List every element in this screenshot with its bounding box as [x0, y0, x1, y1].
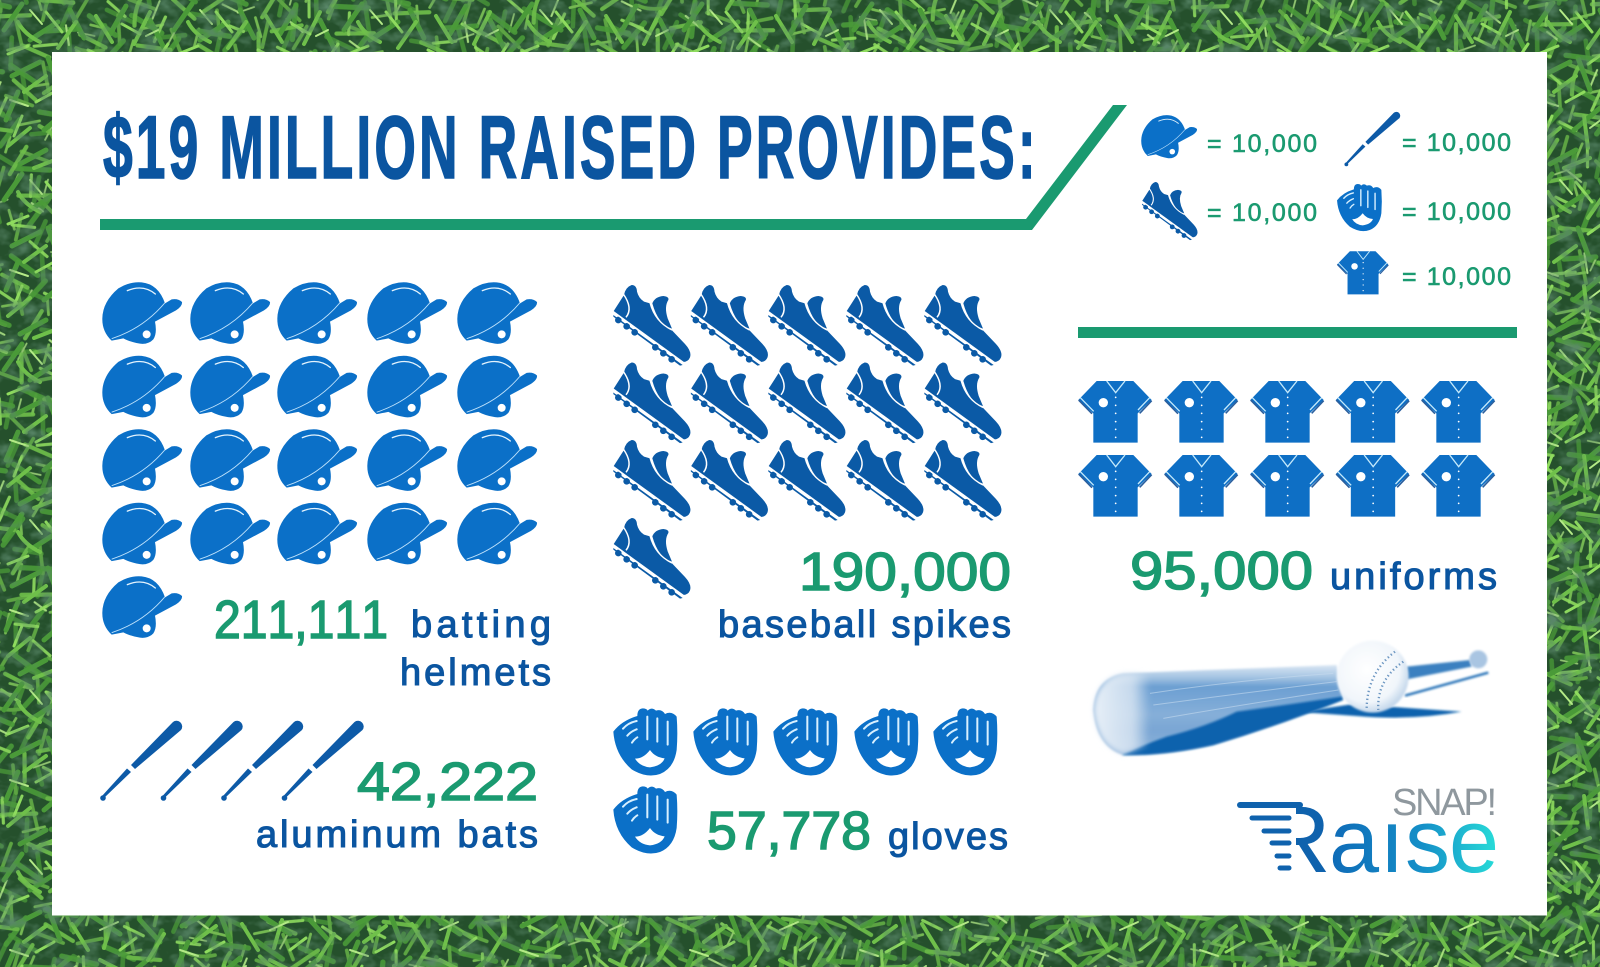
divider bar right column	[1078, 327, 1517, 338]
helmets stat: helmets	[400, 652, 551, 694]
legend: helmet: = 10,000	[1207, 130, 1317, 158]
legend	[1141, 112, 1511, 294]
title underline with diagonal	[100, 105, 1127, 230]
logo: Snap Raise	[1240, 782, 1499, 893]
uniforms stat: uniforms	[1330, 556, 1497, 598]
bats stat: 42,222	[357, 752, 538, 812]
logo: Snap Raise: R	[1262, 787, 1331, 893]
title: $19 MILLION RAISED PROVIDES:	[103, 98, 1039, 197]
gloves pictogram	[613, 708, 997, 854]
logo: Snap Raise: SNAP!	[1392, 782, 1497, 824]
helmets stat	[214, 590, 551, 694]
legend: uniform	[1337, 251, 1511, 294]
spikes stat: baseball spikes	[718, 604, 1011, 646]
gloves stat: gloves	[888, 816, 1008, 858]
bats stat: aluminum bats	[256, 814, 538, 856]
legend: glove: = 10,000	[1402, 198, 1511, 226]
bats pictogram	[100, 721, 364, 801]
spikes pictogram	[613, 285, 1001, 599]
legend: spike	[1142, 182, 1317, 240]
legend: helmet	[1141, 115, 1317, 158]
logo: Snap Raise: aise	[1329, 792, 1499, 892]
uniforms stat: 95,000	[1130, 541, 1313, 601]
uniforms stat	[1130, 541, 1497, 601]
spikes stat	[718, 542, 1011, 646]
legend: bat: = 10,000	[1402, 129, 1511, 157]
bats stat	[256, 752, 538, 856]
helmets pictogram	[102, 282, 537, 638]
helmets stat: batting	[411, 604, 551, 646]
legend: uniform: = 10,000	[1402, 263, 1511, 291]
gloves stat	[707, 801, 1008, 861]
legend: glove	[1337, 184, 1511, 231]
photo: bat and ball	[1093, 641, 1488, 755]
legend: spike: = 10,000	[1207, 199, 1317, 227]
spikes stat: 190,000	[799, 542, 1011, 602]
uniforms pictogram	[1078, 381, 1495, 517]
helmets stat: 211,111	[214, 590, 388, 650]
gloves stat: 57,778	[707, 801, 871, 861]
legend: bat	[1344, 112, 1511, 166]
